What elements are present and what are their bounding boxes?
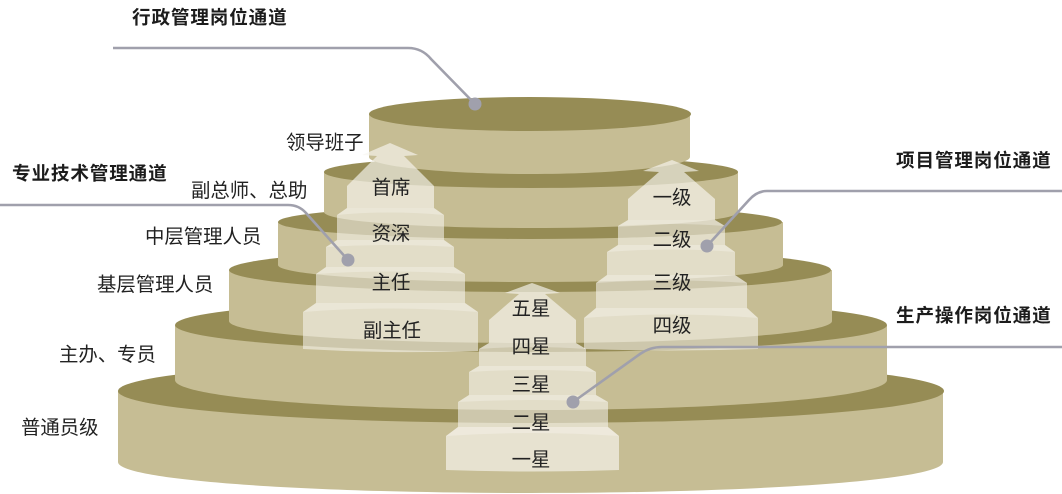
arrow step: 一级 shape: [628, 160, 715, 220]
callout: administrative path: [113, 48, 482, 110]
step: 四级 shape: [584, 308, 758, 350]
disc: tier 1 普通员级: [118, 359, 944, 493]
step label: 五星: 五星: [512, 298, 550, 320]
column: production operation steps: [446, 283, 619, 472]
step: 二星 shape: [458, 395, 608, 427]
heading: 专业技术管理通道: 专业技术管理通道: [12, 163, 168, 184]
label: 主办、专员: 主办、专员: [59, 344, 156, 366]
heading: 行政管理岗位通道: 行政管理岗位通道: [132, 7, 288, 28]
callout: project management path: [700, 191, 1062, 252]
disc: tier 2 主办、专员: [175, 298, 887, 410]
step: 二级 shape: [618, 220, 725, 245]
step label: 三级: 三级: [653, 272, 691, 294]
step label: 二级: 二级: [653, 229, 691, 251]
step label: 三星: 三星: [512, 374, 550, 396]
tiered pyramid of discs: [118, 97, 944, 493]
step label: 副主任: 副主任: [363, 320, 421, 342]
step: 主任 lower shape: [316, 267, 465, 303]
step: 资深 shape: [337, 208, 444, 240]
disc: tier 5 副总师、总助: [324, 156, 738, 228]
step: 副主任 shape: [303, 303, 478, 352]
step label: 主任: 主任: [372, 272, 410, 294]
step label: 四级: 四级: [653, 315, 691, 337]
label: 中层管理人员: 中层管理人员: [145, 226, 261, 248]
rank labels: [21, 132, 364, 439]
step label: 二星: 二星: [512, 412, 550, 434]
step: 一星 shape: [446, 427, 619, 472]
step: 三级 upper shape: [607, 245, 735, 275]
label: 副总师、总助: 副总师、总助: [191, 180, 307, 202]
heading: 生产操作岗位通道: 生产操作岗位通道: [896, 305, 1052, 326]
label: 领导班子: 领导班子: [286, 132, 364, 154]
callout: professional technical path: [0, 205, 354, 266]
disc: tier 4 中层管理人员: [278, 205, 783, 282]
disc: tier 6 领导班子: [369, 97, 691, 174]
label: 普通员级: 普通员级: [21, 417, 99, 439]
heading: 项目管理岗位通道: 项目管理岗位通道: [896, 150, 1052, 171]
step: 三级 lower shape: [596, 275, 747, 308]
step label: 一级: 一级: [653, 187, 691, 209]
step: 主任 upper shape: [326, 240, 454, 267]
step labels: [363, 177, 691, 471]
arrow step: 首席 shape: [347, 143, 434, 208]
disc: tier 3 基层管理人员: [229, 248, 832, 343]
column: project management steps: [584, 160, 758, 350]
step label: 资深: 资深: [372, 223, 410, 245]
column: professional technical steps: [303, 143, 478, 352]
step label: 四星: 四星: [512, 336, 550, 358]
step label: 一星: 一星: [512, 449, 550, 471]
arrow step: 五星 shape: [489, 283, 576, 343]
label: 基层管理人员: 基层管理人员: [97, 274, 213, 296]
step: 三星 shape: [469, 366, 596, 395]
step: 四星 shape: [479, 343, 586, 366]
step label: 首席: 首席: [372, 177, 410, 199]
callout: production operation path: [566, 347, 1062, 408]
